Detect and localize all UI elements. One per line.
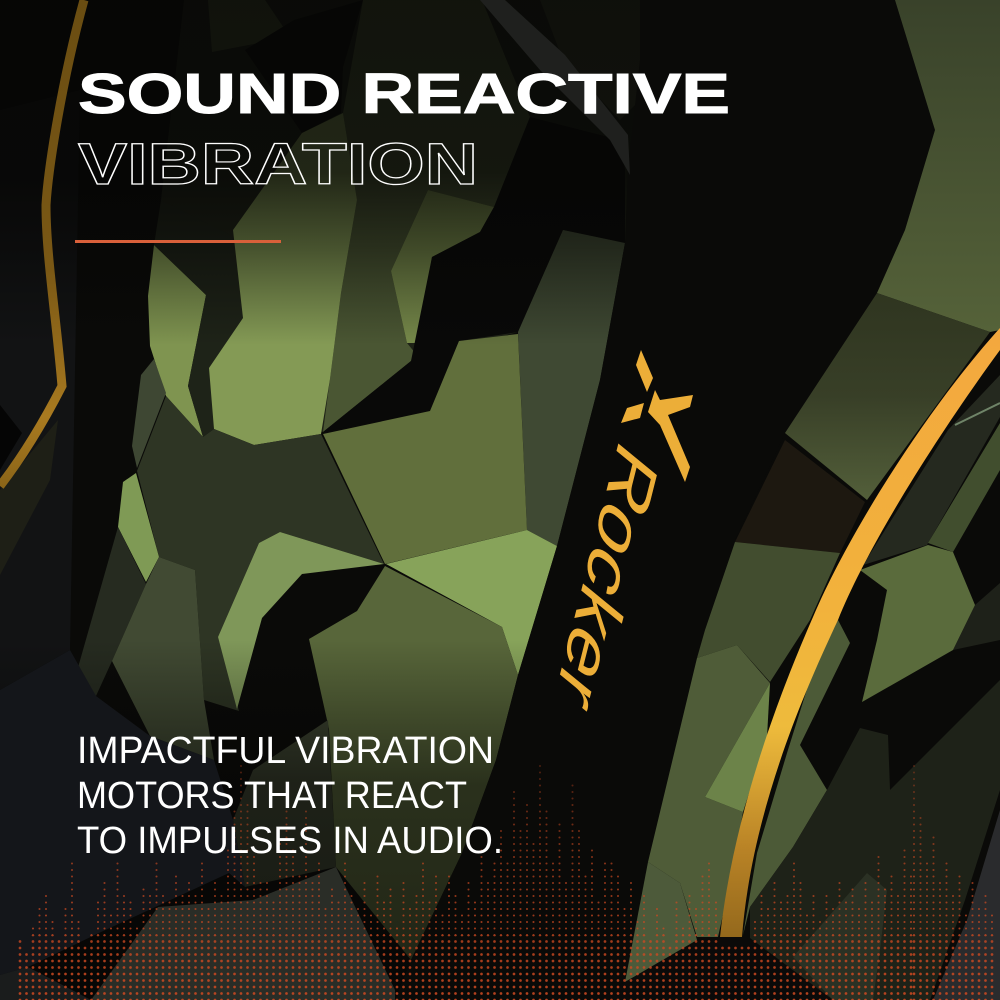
camo piece: bright centre shard xyxy=(209,113,357,445)
title line: SOUND REACTIVE: SOUND REACTIVE xyxy=(78,62,730,126)
halftone audio equaliser dots xyxy=(20,763,992,1000)
logo wordmark: Rocker xyxy=(544,427,670,730)
title line: VIBRATION outlined: VIBRATION xyxy=(78,132,478,197)
body text: MOTORS THAT REACT xyxy=(77,775,467,817)
panel: grey backdrop left of the chair xyxy=(0,90,80,690)
brand logo: X Rocker embroidery xyxy=(544,350,693,730)
panel: bottom-left seat shapes xyxy=(0,650,395,1000)
shading overlay: top xyxy=(0,0,640,345)
leather seam highlight xyxy=(480,0,630,175)
panel: camouflage chair fabric, upper centre xyxy=(148,0,640,564)
black wedge xyxy=(323,117,625,432)
panel: black centre strip of the seat xyxy=(395,0,935,1000)
title xyxy=(78,62,730,197)
left piping xyxy=(0,0,84,486)
shading overlay: bottom xyxy=(0,640,640,1000)
panel: camouflage chair fabric, lower centre xyxy=(77,359,557,960)
yellow piping xyxy=(720,328,1000,937)
body text: IMPACTFUL VIBRATION xyxy=(77,730,494,772)
camo piece: lit olive centre xyxy=(323,334,527,564)
body text: TO IMPULSES IN AUDIO. xyxy=(77,820,503,862)
logo icon: X mark xyxy=(621,350,693,482)
camo piece: bright left shard xyxy=(148,245,206,437)
panel: camouflage chair fabric, right side xyxy=(600,0,1000,1000)
seat mound at the foot of the piping xyxy=(600,937,833,1000)
orange divider rule xyxy=(75,240,281,243)
body text xyxy=(77,730,503,862)
